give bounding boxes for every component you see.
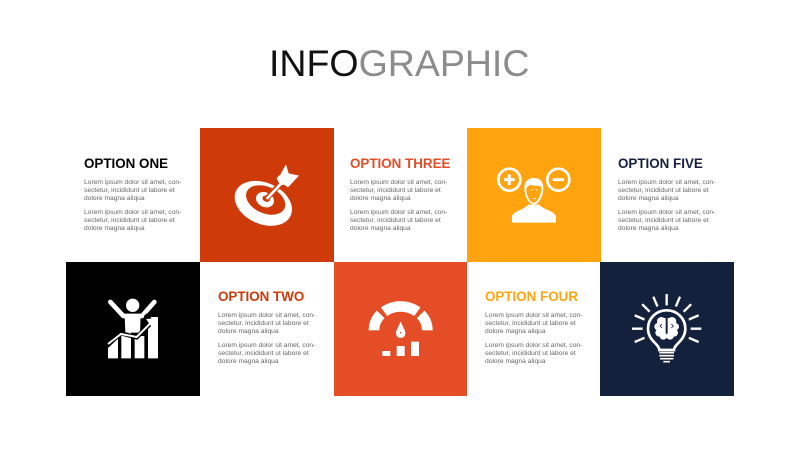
icon: target with arrow [228,164,299,234]
text block: option two [218,289,316,365]
panel: gauge icon tile [334,262,467,396]
paragraph 2: dolore magna aliqua [84,225,145,232]
paragraph 1: Lorem ipsum dolor sit amet, con- [350,179,447,186]
paragraph 1 [618,179,716,202]
paragraph 1: dolore magna aliqua [350,195,411,202]
paragraph 2: sectetur, incididunt ut labore et [84,217,175,224]
text block: option one [84,156,182,232]
paragraph 1 [485,312,582,335]
paragraph 2: Lorem ipsum dolor sit amet, con- [485,342,582,349]
paragraph 1: dolore magna aliqua [84,195,145,202]
panel: person with plus and minus icon tile [467,128,601,262]
paragraph 2: Lorem ipsum dolor sit amet, con- [350,209,447,216]
heading: option two: OPTION TWO [218,289,304,304]
paragraph 1: Lorem ipsum dolor sit amet, con- [218,312,315,319]
panel: idea bulb icon tile [600,262,734,396]
text block: option four [485,289,582,365]
paragraph 1 [84,179,182,202]
paragraph 2: sectetur, incididunt ut labore et [485,350,576,357]
heading: option five: OPTION FIVE [618,156,703,171]
paragraph 2: Lorem ipsum dolor sit amet, con- [84,209,181,216]
heading: option one: OPTION ONE [84,156,168,171]
paragraph 1: sectetur, incididunt ut labore et [218,320,309,327]
panel: target icon tile [200,128,334,262]
icon: person weighing plus and minus [498,169,569,223]
paragraph 1: dolore magna aliqua [485,328,546,335]
paragraph 2: dolore magna aliqua [350,225,411,232]
paragraph 2: sectetur, incididunt ut labore et [218,350,309,357]
text block: option five [618,156,716,232]
paragraph 2: dolore magna aliqua [218,358,279,365]
icon: gauge with level bars [374,306,427,356]
paragraph 1: sectetur, incididunt ut labore et [84,187,175,194]
paragraph 2 [485,342,582,365]
paragraph 2 [218,342,316,365]
paragraph 2: sectetur, incididunt ut labore et [618,217,709,224]
paragraph 1 [350,179,448,202]
paragraph 2 [84,209,182,232]
paragraph 2: dolore magna aliqua [618,225,679,232]
heading: option four: OPTION FOUR [485,289,578,304]
paragraph 1: sectetur, incididunt ut labore et [350,187,441,194]
heading: option three: OPTION THREE [350,156,450,171]
paragraph 2: Lorem ipsum dolor sit amet, con- [618,209,715,216]
paragraph 1 [218,312,316,335]
title: INFOGRAPHIC [269,42,529,84]
paragraph 2 [618,209,716,232]
paragraph 2: dolore magna aliqua [485,358,546,365]
panel: growth chart icon tile [66,262,200,396]
icon: person raising arms over bar chart [107,299,158,358]
paragraph 1: dolore magna aliqua [218,328,279,335]
paragraph 1: Lorem ipsum dolor sit amet, con- [485,312,582,319]
paragraph 1: sectetur, incididunt ut labore et [485,320,576,327]
paragraph 1: sectetur, incididunt ut labore et [618,187,709,194]
paragraph 2: sectetur, incididunt ut labore et [350,217,441,224]
paragraph 1: Lorem ipsum dolor sit amet, con- [84,179,181,186]
icon: light bulb with brain [632,294,701,362]
paragraph 1: dolore magna aliqua [618,195,679,202]
text block: option three [350,156,450,232]
paragraph 2 [350,209,448,232]
paragraph 2: Lorem ipsum dolor sit amet, con- [218,342,315,349]
paragraph 1: Lorem ipsum dolor sit amet, con- [618,179,715,186]
